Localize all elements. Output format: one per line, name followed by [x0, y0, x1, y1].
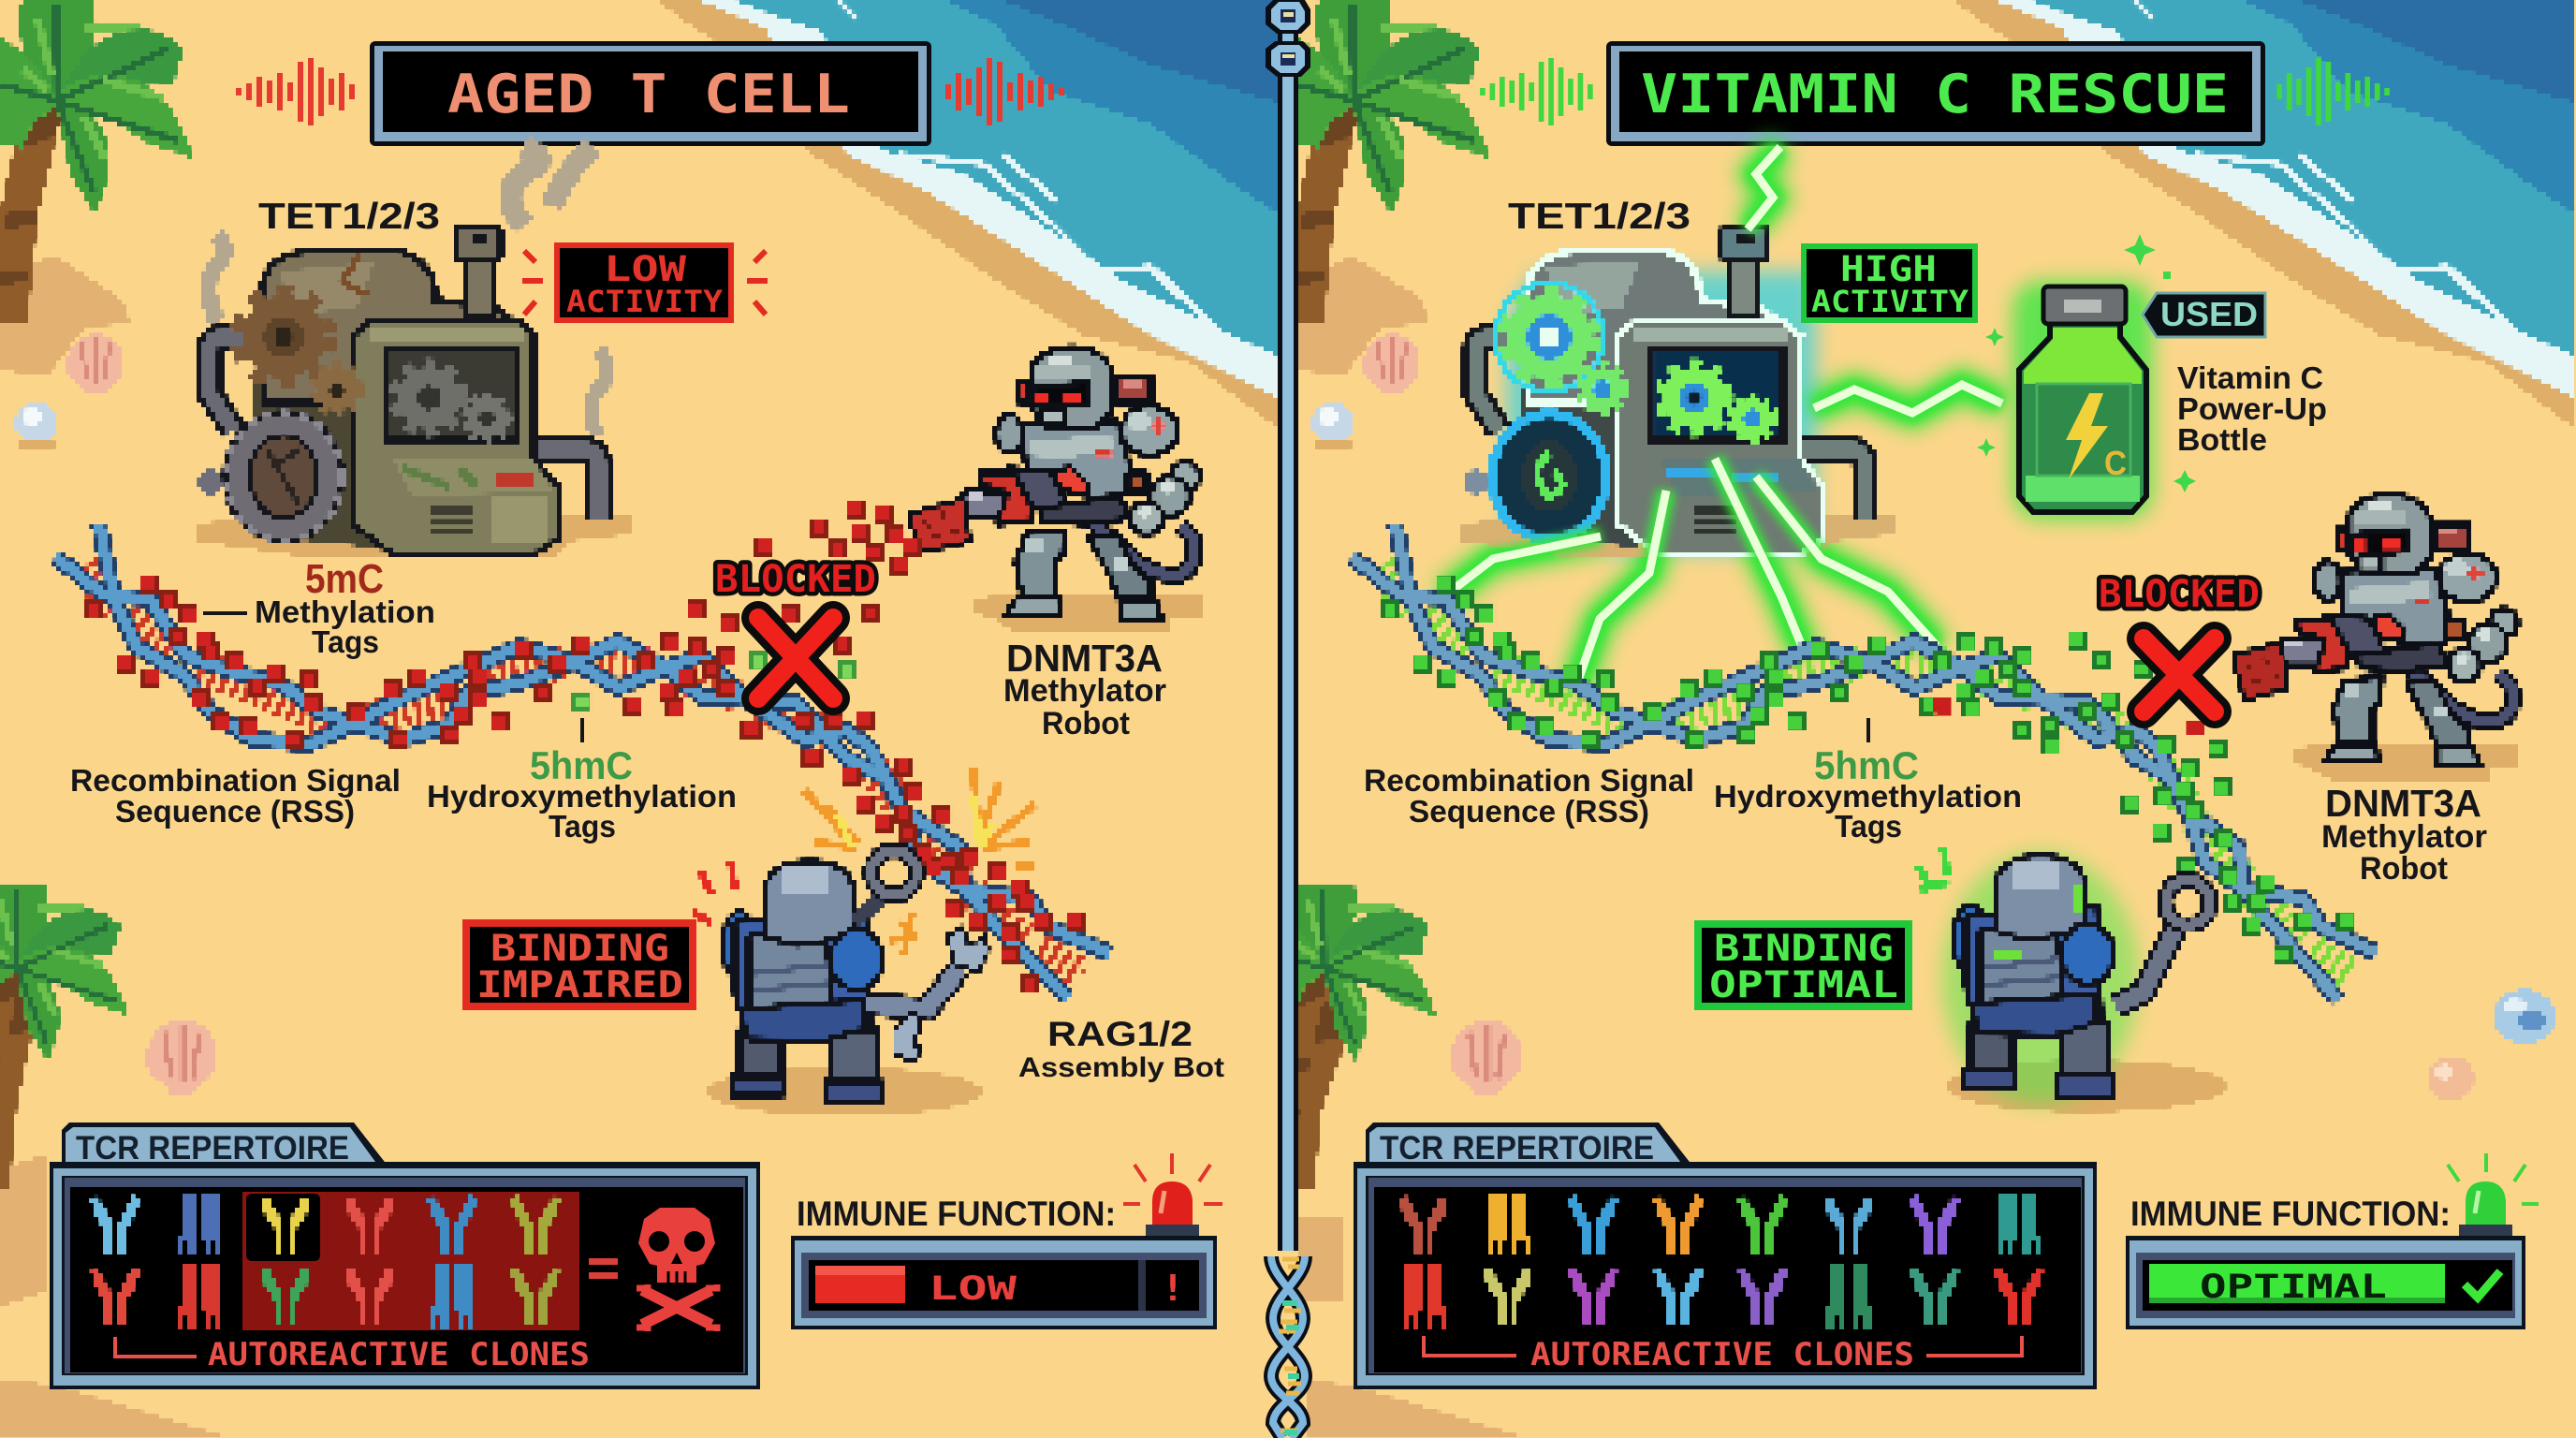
label: 5hmC hydroxymethylation tags: 5hmC: [530, 743, 633, 787]
divider: DNA column: [1266, 0, 1310, 1438]
beach scenery: right: [1278, 0, 2576, 1438]
label: 5hmC hydroxymethylation tags: Tags: [549, 809, 616, 844]
panel: TCR repertoire right: [1354, 1123, 2097, 1389]
immune function meter: optimal: OPTIMAL: [2200, 1269, 2387, 1306]
robot: DNMT3A right: [2232, 494, 2519, 887]
label: IMMUNE FUNCTION:: [2130, 1195, 2451, 1233]
DNA strand with 5mC tags: [56, 508, 1109, 999]
label: recombination signal sequence right: Sequence (RSS): [1409, 794, 1649, 829]
icon: vitamin C power-up bottle: [1977, 234, 2196, 520]
label: 5hmC hydroxymethylation tags right: [1714, 718, 2022, 844]
title banner: vitamin C rescue: VITAMIN C RESCUE: [1641, 64, 2229, 125]
immune function meter: optimal: [2126, 1153, 2539, 1329]
label: DNMT3A: DNMT3A: [2325, 782, 2481, 825]
label: DNMT3A: Robot: [2360, 851, 2448, 887]
badge: binding optimal: BINDING: [1714, 928, 1894, 970]
red 5mC tags: [94, 508, 1075, 985]
label: recombination signal sequence: Recombination Signal: [70, 763, 401, 798]
icon: red siren: [1123, 1153, 1222, 1236]
icon: skull and crossbones: [637, 1208, 717, 1331]
badge: binding impaired: BINDING: [490, 928, 669, 970]
label: 5hmC hydroxymethylation tags right: Hydroxymethylation: [1714, 779, 2022, 814]
panel: TCR repertoire left: [50, 1123, 760, 1389]
label: 5mC methylation tags: [203, 556, 435, 659]
label: TCR repertoire tab: TCR REPERTOIRE: [76, 1130, 349, 1167]
label: TCR repertoire tab: TCR REPERTOIRE: [1380, 1130, 1654, 1167]
label: IMMUNE FUNCTION:: [797, 1195, 1116, 1233]
title banner: aged T cell: [239, 41, 1061, 146]
badge: binding optimal: [1698, 924, 1909, 1006]
label: 5hmC hydroxymethylation tags right: 5hmC: [1814, 743, 1919, 787]
badge: binding impaired: [466, 923, 693, 1006]
title banner: vitamin C rescue: [1483, 41, 2387, 146]
robot: DNMT3A left: [908, 347, 1201, 741]
icon: red sound waves: [239, 58, 1061, 125]
icon: green sound waves: [1483, 58, 2387, 125]
badge: binding impaired: IMPAIRED: [476, 964, 683, 1006]
label: autoreactive clones: AUTOREACTIVE CLONES: [208, 1336, 590, 1373]
antibody grid: [1399, 1195, 2043, 1328]
icon: green siren: [2448, 1153, 2539, 1236]
label: recombination signal sequence right: [1364, 763, 1694, 829]
immune function meter: low: !: [1161, 1268, 1185, 1309]
label: DNMT3A: DNMT3A: [1006, 637, 1163, 680]
machine: broken TET1/2/3: [197, 147, 633, 557]
robot: RAG1/2 right: [1919, 847, 2226, 1112]
sparkles: [1977, 234, 2196, 492]
label: blocked X right: BLOCKED: [2099, 573, 2260, 616]
label: 5hmC hydroxymethylation tags right: Tags: [1835, 809, 1902, 844]
label: 5hmC hydroxymethylation tags: Hydroxymethylation: [427, 779, 737, 814]
badge: high activity: HIGH: [1840, 249, 1937, 289]
label: vitamin C bottle: Power-Up: [2177, 391, 2327, 426]
label: autoreactive clones: [1424, 1336, 2022, 1373]
label: autoreactive clones: AUTOREACTIVE CLONES: [1530, 1336, 1914, 1373]
label: RAG1/2: Assembly Bot: [1018, 1052, 1224, 1083]
label: RAG1/2: [1018, 1015, 1224, 1083]
label: 5mC methylation tags: 5mC: [305, 556, 384, 602]
badge: high activity: [1804, 246, 1975, 320]
DNA strand with 5hmC tags: [1353, 524, 2377, 999]
label: TET1/2/3: TET1/2/3: [1508, 197, 1690, 237]
tag: used: USED: [2160, 295, 2258, 333]
antibody grid: [91, 1195, 560, 1328]
icon: vitamin C power-up bottle: C: [2104, 444, 2127, 482]
badge: low activity: LOW: [604, 249, 687, 289]
label: vitamin C bottle: Vitamin C: [2177, 360, 2323, 395]
tag: used: [2143, 293, 2265, 337]
immune function meter: low: [791, 1153, 1222, 1329]
label: vitamin C bottle: Bottle: [2177, 422, 2267, 457]
energy beams: [1444, 147, 2002, 688]
label: recombination signal sequence right: Recombination Signal: [1364, 763, 1694, 798]
badge: low activity: [522, 245, 768, 320]
machine: energized TET1/2/3: [1444, 147, 2002, 688]
label: 5mC methylation tags: Methylation: [255, 594, 435, 629]
badge: binding optimal: OPTIMAL: [1709, 964, 1898, 1006]
label: 5hmC hydroxymethylation tags: [427, 718, 737, 844]
label: vitamin C bottle: [2177, 360, 2327, 457]
green 5hmC tags: [1390, 584, 2346, 955]
label: blocked X left: BLOCKED: [715, 558, 876, 601]
icon: check mark: [2465, 1271, 2500, 1298]
energy glow: [1444, 147, 2002, 688]
label: blocked X left: [715, 558, 876, 698]
badge: high activity: ACTIVITY: [1811, 284, 1969, 319]
label: DNMT3A: [1003, 637, 1166, 741]
label: recombination signal sequence: [70, 763, 401, 829]
label: recombination signal sequence: Sequence (RSS): [115, 794, 355, 829]
beach scenery: left: [0, 0, 1288, 1438]
label: RAG1/2: RAG1/2: [1047, 1015, 1193, 1053]
badge: low activity: ACTIVITY: [566, 284, 724, 319]
label: DNMT3A: Robot: [1042, 706, 1130, 741]
label: TET1/2/3: TET1/2/3: [258, 197, 440, 237]
label: DNMT3A: [2321, 782, 2487, 887]
label: DNMT3A: Methylator: [1003, 673, 1166, 709]
robot: RAG1/2 left with sparks: [693, 768, 1224, 1116]
label: 5mC methylation tags: Tags: [312, 624, 379, 659]
immune function meter: low: LOW: [929, 1270, 1017, 1308]
label: blocked X right: [2099, 573, 2260, 712]
title banner: aged T cell: AGED T CELL: [447, 64, 850, 125]
label: DNMT3A: Methylator: [2321, 819, 2487, 855]
